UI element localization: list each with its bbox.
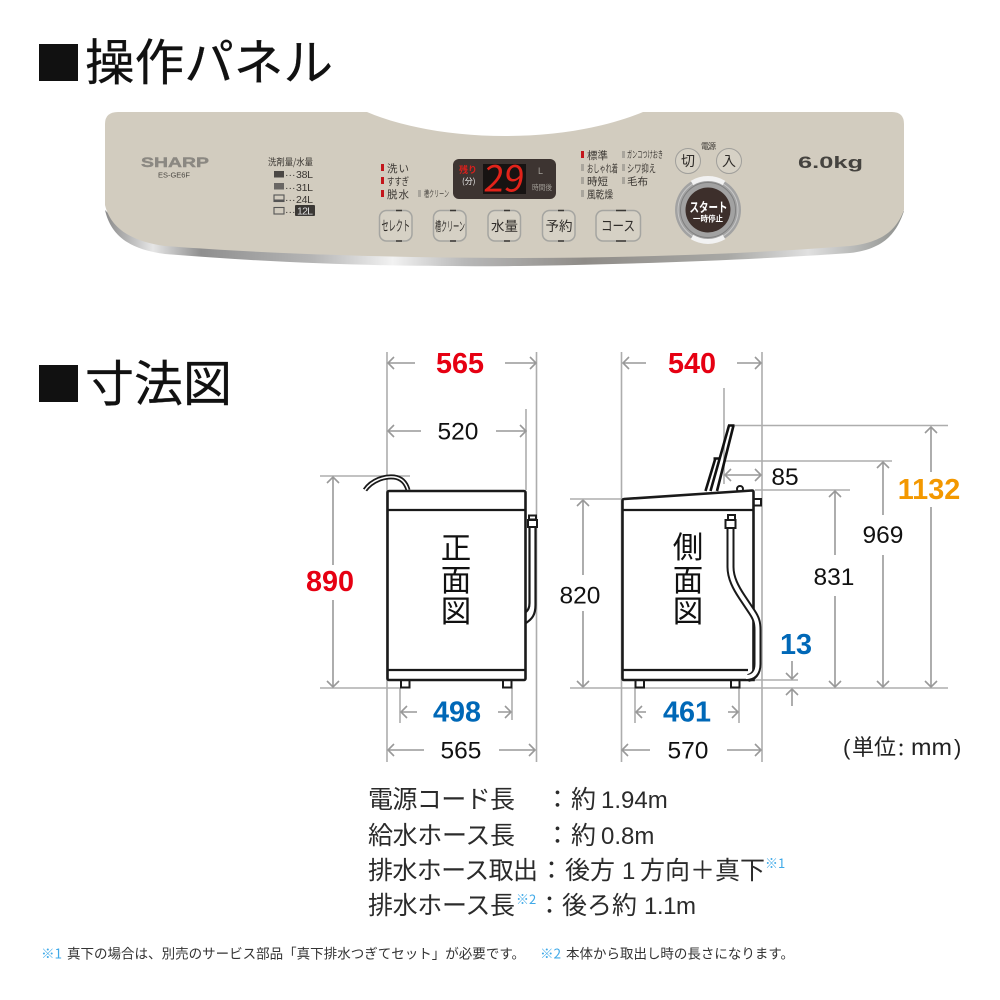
lid: [706, 426, 734, 491]
detergent and water level list: 洗剤量/水量: [268, 154, 313, 168]
spec: power cord length: 約: [571, 780, 596, 816]
dimension labels: 570: [668, 738, 708, 764]
spec: supply hose length: [368, 816, 654, 852]
button: 予約: [542, 210, 575, 241]
dimension labels: 540: [668, 348, 716, 380]
power buttons: 切: [681, 151, 695, 171]
spec: drain hose outlet: 1: [622, 858, 635, 885]
spec: drain hose outlet: ※1: [765, 853, 785, 872]
label: 正面図: 正: [441, 524, 471, 568]
dimension labels: 461: [663, 696, 711, 728]
indicator list: process: 槽クリーン: [424, 187, 449, 200]
body: [622, 490, 754, 680]
logo: SHARP: ES-GE6F: [158, 170, 190, 180]
unit note: :: [898, 730, 904, 762]
unit note: [843, 730, 961, 762]
unit note: mm: [911, 734, 952, 760]
button: セレクト: [380, 210, 412, 241]
spec list: [368, 780, 785, 922]
panel: control panel: 槽クリーン: [435, 216, 465, 235]
detergent and water level list: ···: [285, 206, 296, 218]
spec: drain hose length: ※2: [516, 889, 536, 908]
spec: supply hose length: 約: [571, 816, 596, 852]
digital display: [453, 151, 556, 202]
button: 槽クリーン: [434, 210, 466, 241]
spec: supply hose length: 給水ホース長: [368, 816, 515, 852]
button: コース: [596, 210, 640, 241]
button: 水量: 水量: [491, 215, 518, 235]
diagram: side view washer: [622, 426, 761, 688]
footnotes: 真下の場合は、別売のサービス部品「真下排水つぎてセット」が必要です。: [67, 942, 525, 962]
power buttons: 電源: [701, 141, 716, 152]
label: 側面図: [673, 523, 703, 631]
dimension labels: 520: [438, 418, 478, 446]
dimension labels: 890: [306, 566, 354, 598]
power cord: [365, 477, 408, 490]
detergent and water level list: [268, 154, 315, 218]
start button: [675, 177, 741, 243]
indicator list: courses: ガンコつけおき: [627, 147, 663, 161]
hose: [526, 527, 536, 623]
footnotes: 本体から取出し時の長さになります。: [566, 942, 794, 962]
detergent and water level list: ···: [285, 182, 296, 194]
spec: drain hose length: 1.1m: [644, 893, 696, 920]
spec: power cord length: 電源コード長: [368, 780, 515, 816]
spec: drain hose length: 排水ホース長: [368, 886, 515, 922]
spec: power cord length: 1.94m: [601, 787, 668, 814]
spec: drain hose length: ：: [537, 886, 562, 922]
dimension labels: 820: [560, 582, 600, 610]
spec: drain hose outlet: ：: [539, 851, 564, 887]
dimension labels: 13: [780, 629, 812, 661]
feet: [401, 680, 410, 688]
feet: [636, 680, 644, 688]
spec: drain hose outlet: 真下: [715, 851, 765, 887]
button: コース: コース: [601, 216, 635, 236]
start button: スタート: [690, 197, 728, 216]
digital display: L: [538, 166, 543, 176]
spec: drain hose length: [368, 886, 696, 922]
panel: control panel: [105, 112, 904, 266]
spec: drain hose outlet: ＋: [690, 851, 715, 887]
dimension labels: 565: [436, 348, 484, 380]
spec: drain hose outlet: [368, 851, 785, 887]
dimension lines: front view: [320, 352, 589, 762]
spec: supply hose length: 0.8m: [601, 823, 654, 850]
unit note: ): [954, 735, 961, 760]
label: 側面図: 面: [673, 556, 703, 600]
detergent and water level list: 24L: [296, 194, 313, 206]
indicator list: courses: 標 準: [587, 148, 608, 163]
spec: supply hose length: ：: [545, 816, 570, 852]
detergent and water level list: 31L: [296, 182, 313, 194]
arrows: width: [388, 357, 536, 369]
indicator list: process: 洗 い: [387, 161, 409, 176]
dimension labels: 969: [863, 522, 903, 549]
power buttons: [676, 141, 742, 174]
unit note: 単位: [852, 730, 896, 762]
spec: power cord length: [368, 780, 668, 816]
detergent and water level list: ···: [285, 194, 296, 206]
dimension labels: 498: [433, 696, 481, 728]
indicator list: process: 脱 水: [387, 187, 410, 202]
unit note: (: [843, 735, 851, 760]
indicator list: courses: [581, 147, 663, 202]
label: 側面図: 図: [673, 587, 703, 631]
digital display: 時間後: [532, 182, 552, 193]
indicator list: courses: シワ抑え: [627, 161, 656, 176]
dimension labels: 85: [771, 464, 799, 491]
indicator list: courses: 時 短: [587, 174, 608, 189]
knob and rear tab: [737, 486, 743, 492]
hose: [730, 526, 758, 678]
spec: power cord length: ：: [545, 780, 570, 816]
dimension lines: side view: [570, 352, 948, 762]
detergent and water level list: 38L: [296, 169, 313, 181]
dimension labels: 1132: [898, 474, 960, 506]
label: 正面図: 面: [441, 556, 471, 600]
heading: 操作パネル: 操作パネル: [85, 24, 333, 95]
heading: 寸法図: 寸法図: [85, 345, 232, 416]
dimension labels: [306, 348, 960, 764]
footnotes: ※1: [41, 942, 62, 962]
digital display: 29: [482, 151, 527, 202]
power buttons: 入: [722, 151, 736, 171]
indicator list: courses: 風乾燥: [587, 187, 613, 202]
spec: drain hose length: 後ろ約: [562, 886, 637, 922]
dimension labels: 831: [814, 564, 854, 591]
body: [388, 491, 526, 680]
diagram: front view washer: [365, 477, 537, 688]
label: 側面図: 側: [673, 523, 703, 567]
digital display: (分): [462, 176, 475, 187]
panel face: [105, 112, 904, 258]
label: 正面図: 図: [441, 587, 471, 631]
spec: drain hose outlet: 方向: [640, 851, 690, 887]
spec: drain hose outlet: 後方: [565, 851, 615, 887]
detergent and water level list: 12L: [297, 206, 313, 218]
capacity label: 6.0kg: [798, 153, 863, 172]
indicator list: process: [381, 161, 449, 202]
button: 予約: 予約: [546, 215, 572, 235]
spec: drain hose outlet: 排水ホース取出: [368, 851, 538, 887]
indicator list: courses: おしゃれ着: [587, 161, 618, 176]
footnotes: ※2: [540, 942, 561, 962]
label: 正面図: [441, 524, 471, 631]
indicator list: process: すすぎ: [387, 174, 409, 189]
button: セレクト: セレクト: [382, 216, 410, 236]
logo: SHARP: [141, 154, 209, 180]
dimension labels: 565: [441, 738, 481, 764]
silver edge: [105, 210, 904, 266]
detergent and water level list: ···: [285, 169, 296, 181]
button: 水量: [488, 210, 520, 241]
start button: 一時停止: [693, 214, 723, 224]
logo: SHARP: SHARP: [141, 154, 209, 170]
footnotes: [41, 942, 794, 962]
indicator list: courses: 毛 布: [627, 174, 648, 189]
digital display: 残り: [459, 163, 477, 176]
